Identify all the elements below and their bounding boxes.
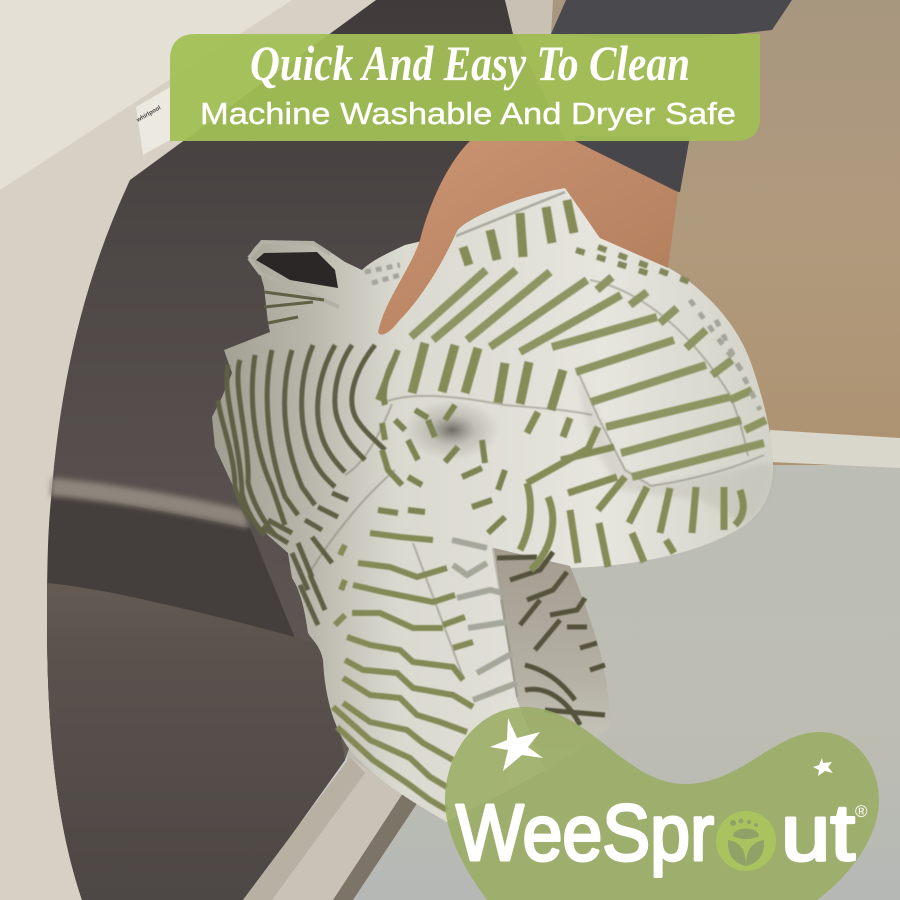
washer lid panel — [0, 0, 292, 190]
icon: small star — [813, 758, 833, 776]
logo wordmark start: WeeSpr — [456, 788, 714, 877]
left fan stripes — [218, 345, 385, 625]
photo background: tan wall — [0, 0, 900, 470]
icon: large star — [490, 718, 543, 771]
grey faded stripes — [452, 540, 517, 700]
washer opening — [47, 0, 570, 900]
icon: sprout in the o — [716, 811, 776, 871]
blanket right tail — [494, 548, 610, 770]
upper right door edge — [505, 0, 553, 34]
lid label — [135, 87, 170, 155]
lid label: whirlpool — [135, 105, 162, 124]
subheading: Machine Washable And Dryer Safe — [200, 96, 736, 131]
lower tail stripes — [333, 533, 473, 810]
blanket tag — [249, 242, 339, 323]
logo wordmark end: ut — [781, 788, 855, 877]
bright fold shade — [576, 370, 773, 525]
logo blob — [445, 707, 879, 900]
striped swaddle blanket — [212, 188, 773, 822]
arm sleeve — [551, 0, 792, 192]
heading: script title: Quick And Easy To Clean — [250, 35, 690, 91]
logo: WeeSprout — [445, 707, 879, 900]
left fan green stripes — [378, 350, 505, 533]
middle row stripes — [412, 200, 574, 410]
top fold stripes — [411, 270, 764, 477]
hand — [378, 141, 678, 335]
stitched top edge and upper dashes — [365, 192, 760, 410]
knot shading — [404, 400, 500, 460]
banner: green header — [170, 34, 760, 141]
fold stub stripes — [597, 277, 766, 430]
registered mark: ® — [855, 802, 868, 821]
fold creases — [308, 280, 764, 697]
right tail stripes — [497, 552, 605, 725]
lower band stripes — [520, 412, 743, 570]
photo background: washer top surface — [340, 430, 900, 900]
washer cabinet front — [0, 0, 420, 900]
blanket silhouette — [212, 188, 773, 822]
washer door lip — [243, 757, 418, 900]
